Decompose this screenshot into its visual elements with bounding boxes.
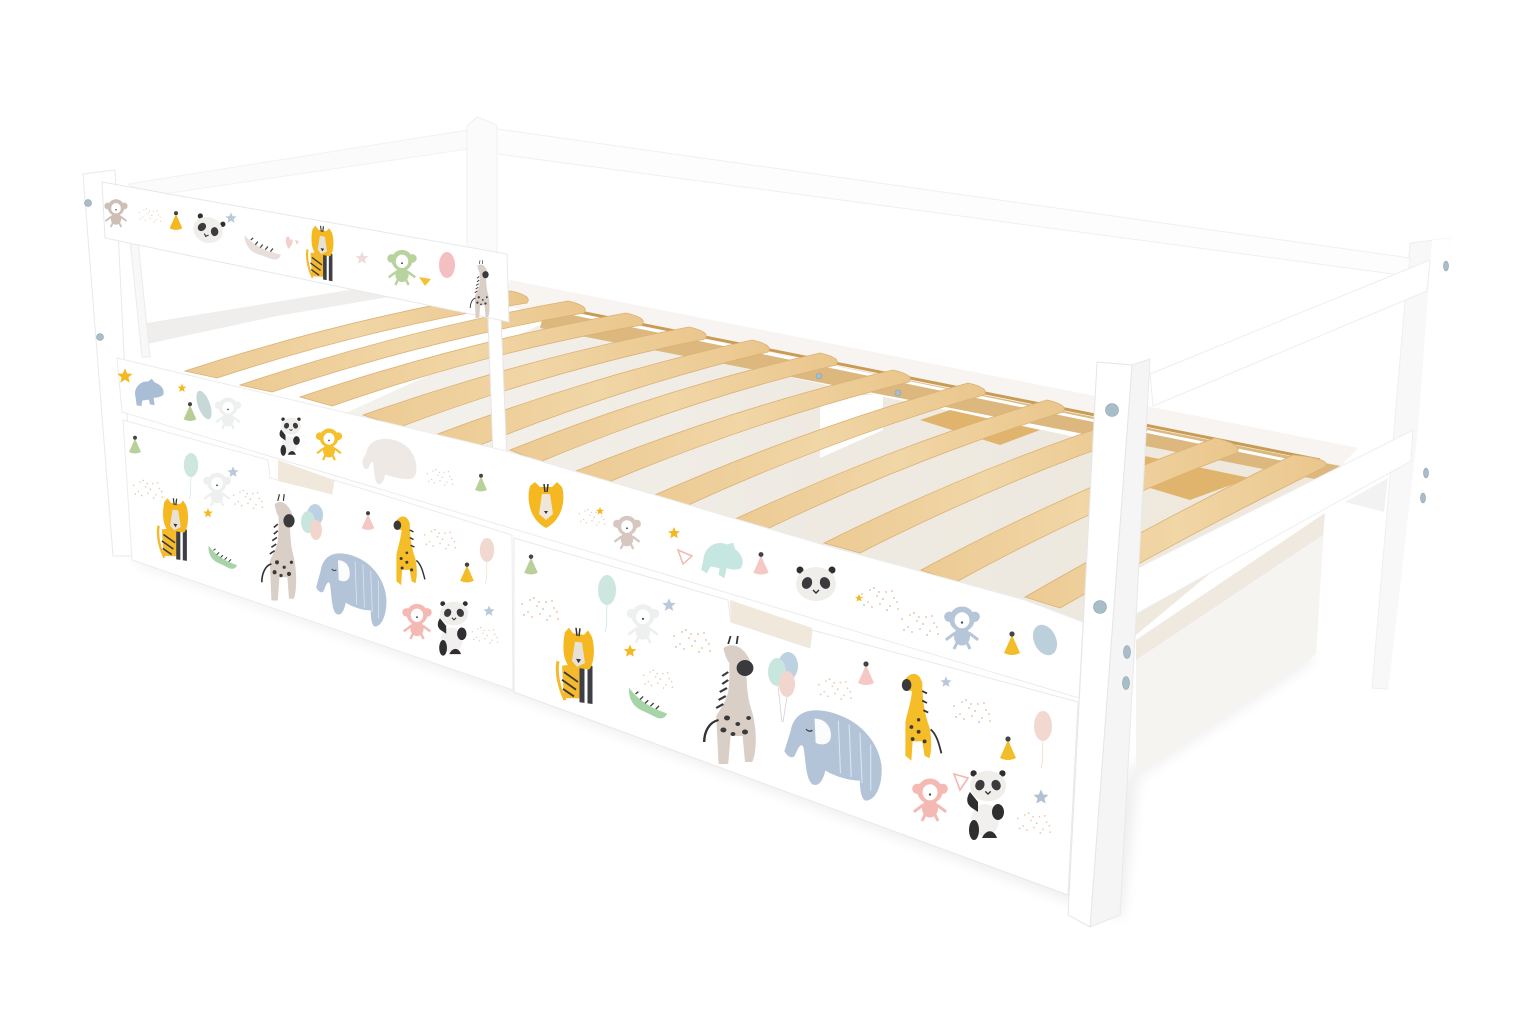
sticker: green monkey bbox=[387, 250, 417, 285]
sticker: pale balloon bbox=[1034, 711, 1052, 768]
sticker: star spark bbox=[356, 252, 368, 264]
sticker: elephant bbox=[784, 704, 882, 803]
sticker: crocodile bbox=[241, 235, 283, 261]
sticker: taupe monkey bbox=[613, 516, 641, 549]
sticker: small giraffe bbox=[470, 260, 490, 318]
sticker: small star bbox=[178, 384, 186, 392]
sticker: dots bbox=[427, 469, 453, 486]
sticker: yellow star bbox=[203, 508, 213, 517]
back left top rail bbox=[128, 130, 468, 196]
left lower back rail bbox=[147, 287, 430, 344]
sticker: mint balloon bbox=[598, 575, 616, 632]
sticker: blue hippo bbox=[135, 379, 164, 406]
right top side rail bbox=[1150, 260, 1430, 406]
rear slat support strip bbox=[540, 308, 1340, 500]
sticker: triangle bbox=[678, 550, 692, 564]
sticker: crocodile bbox=[623, 688, 671, 720]
sticker: pink hat bbox=[858, 661, 874, 685]
sticker: pale bear bbox=[203, 473, 231, 506]
sticker: tiger bbox=[307, 223, 333, 281]
sticker: yellow giraffe bbox=[394, 516, 425, 585]
back top rail bbox=[483, 127, 1410, 276]
sticker: elephant bbox=[316, 549, 386, 629]
under-bed interior bbox=[320, 325, 1340, 650]
sticker: yellow star bbox=[117, 368, 133, 383]
sticker: dots cluster bbox=[579, 509, 605, 526]
center back post bbox=[467, 117, 497, 300]
wooden slats bbox=[185, 291, 1326, 608]
sticker: monkey bbox=[104, 199, 128, 227]
sticker: dots cluster bbox=[818, 678, 852, 700]
sticker: yellow star bbox=[624, 645, 636, 657]
sticker: balloons bbox=[301, 504, 323, 540]
sticker: pink monkey bbox=[402, 604, 432, 639]
left bed post bbox=[83, 170, 134, 556]
left guard support bbox=[130, 240, 150, 357]
sticker: yellow monkey bbox=[316, 429, 342, 460]
sticker: yellow hat bbox=[1004, 631, 1020, 655]
sticker: giraffe bbox=[704, 636, 756, 764]
sticker: pale bear bbox=[627, 604, 659, 643]
right lower side rail bbox=[1136, 430, 1413, 614]
back frame board bbox=[500, 280, 1358, 472]
sticker: giraffe bbox=[262, 494, 296, 600]
sticker: pink triangle bbox=[954, 774, 968, 790]
sticker: yellow giraffe bbox=[902, 674, 941, 761]
gap between drawers bbox=[820, 395, 883, 458]
sticker: triangle bbox=[419, 277, 431, 286]
sticker: dots cluster 2 bbox=[901, 612, 939, 636]
sticker: blue monkey bbox=[944, 606, 980, 649]
sticker: balloon bbox=[193, 389, 215, 421]
sticker: tiger bbox=[158, 496, 188, 561]
sticker: blue star bbox=[1033, 789, 1049, 804]
sticker: yellow hat bbox=[170, 211, 182, 230]
sticker: dots cluster bbox=[472, 627, 498, 644]
sticker: dots cluster bbox=[521, 597, 559, 621]
sticker: green hat bbox=[129, 436, 141, 454]
sticker: pale bear bbox=[215, 398, 241, 429]
sticker: blue star bbox=[940, 676, 952, 687]
sticker: pale balloon bbox=[480, 538, 494, 584]
sticker: mint balloon bbox=[184, 453, 198, 499]
sticker: hearts bbox=[286, 236, 299, 249]
sticker: tiger head bbox=[529, 482, 563, 528]
guard post bbox=[488, 318, 507, 460]
sticker: dots bbox=[139, 208, 161, 223]
sticker: blue star bbox=[662, 598, 676, 611]
soft floor shadow bbox=[135, 552, 1316, 918]
sticker: pale elephant bbox=[362, 439, 416, 484]
left drawer bbox=[123, 420, 513, 690]
sticker: green hat 2 bbox=[475, 474, 487, 492]
sticker: dots cluster bbox=[233, 490, 263, 509]
sticker: pink hat bbox=[753, 552, 769, 574]
sticker: dots cluster 2 bbox=[643, 670, 673, 689]
sticker: pink balloon bbox=[439, 252, 455, 278]
sticker: mint hippo bbox=[699, 535, 748, 584]
side board with stickers bbox=[117, 358, 1083, 698]
sticker: panda bbox=[280, 418, 301, 456]
sticker: pink monkey bbox=[912, 778, 948, 821]
front right bed post bbox=[1068, 359, 1150, 927]
back cross support bbox=[1345, 478, 1388, 512]
sticker: dots cluster bbox=[861, 587, 899, 611]
sticker: small star bbox=[855, 594, 863, 602]
sticker: blue balloon bbox=[1028, 621, 1062, 659]
sticker: dots cluster bbox=[1017, 812, 1051, 834]
sticker: yellow hat bbox=[1000, 736, 1016, 760]
sticker: dots cluster bbox=[673, 629, 711, 653]
far right bed post bbox=[1372, 238, 1450, 692]
sticker: blue star bbox=[225, 212, 237, 223]
handle notch left bbox=[278, 460, 334, 494]
sticker: dots cluster bbox=[424, 529, 456, 549]
sticker: blue star bbox=[483, 605, 495, 616]
sticker: green hat bbox=[524, 554, 538, 574]
sticker: small yellow star bbox=[596, 507, 604, 514]
right under-bed drawer side bbox=[1136, 513, 1325, 776]
sticker: dots cluster bbox=[953, 699, 991, 723]
sticker: panda bbox=[438, 601, 468, 656]
sticker: blue star bbox=[227, 466, 239, 477]
sticker: yellow star bbox=[668, 527, 680, 538]
screws bbox=[84, 200, 1448, 690]
sticker: green hat bbox=[184, 402, 196, 421]
sticker: dots bbox=[133, 480, 163, 499]
sticker: yellow hat bbox=[460, 562, 474, 582]
sticker: panda head bbox=[796, 566, 836, 601]
sticker: balloons bbox=[768, 652, 798, 722]
sticker: panda head bbox=[190, 213, 227, 247]
sticker: pink hat bbox=[362, 511, 374, 530]
sticker: tiger bbox=[557, 625, 594, 704]
handle notch right bbox=[730, 600, 812, 648]
guard board with stickers bbox=[102, 182, 509, 322]
right drawer bbox=[514, 538, 1078, 895]
sticker: panda bbox=[967, 770, 1006, 840]
sticker: crocodile bbox=[204, 546, 240, 570]
